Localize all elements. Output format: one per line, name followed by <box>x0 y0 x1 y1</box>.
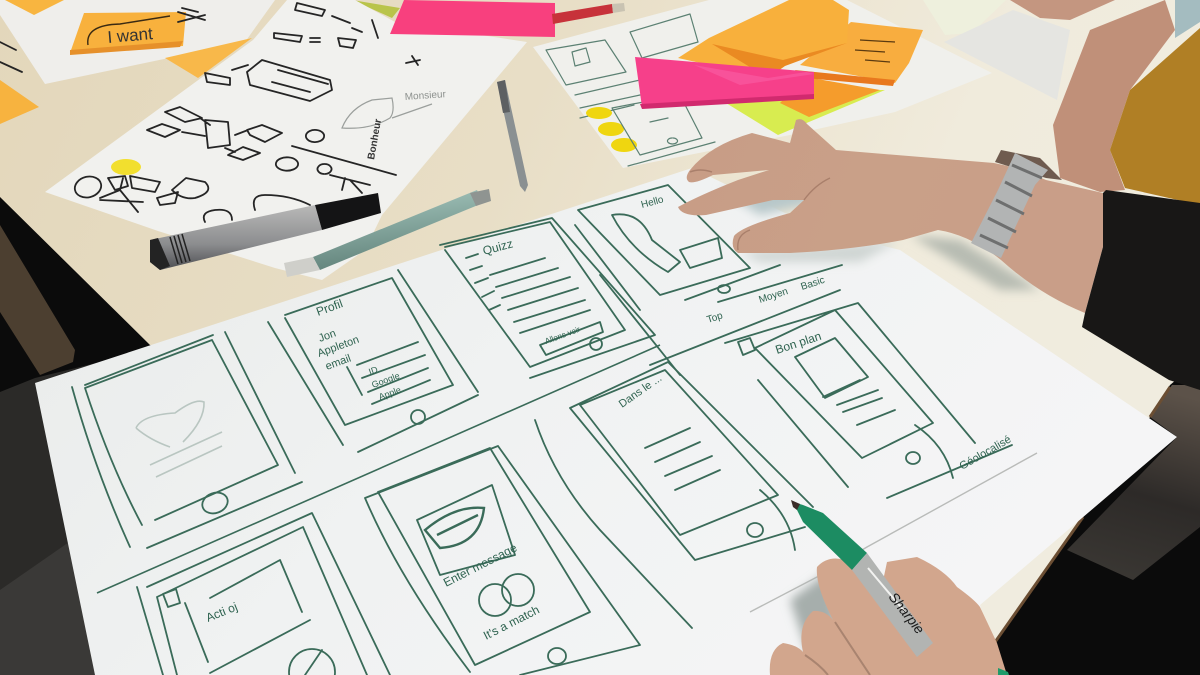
wireframe: profile screen: ID <box>367 364 380 377</box>
top-left paper with sticky notes: I want <box>107 24 154 47</box>
icon sketch sheet <box>45 0 527 280</box>
writing hand <box>770 557 1009 675</box>
wireframe: hero screen under hand: Basic <box>800 275 826 293</box>
wireframe: match screen <box>365 446 640 675</box>
top row icons <box>274 3 378 48</box>
wireframe: good deal screen: Bon plan <box>774 329 823 357</box>
icon sketch sheet: Monsieur <box>404 89 447 103</box>
wireframe: article screen: Dans le ... <box>617 372 664 410</box>
wireframe: profile screen: Profil <box>314 296 345 319</box>
wireframe: match screen: Enter message <box>441 540 520 590</box>
icon sketch sheet: Bonheur <box>366 118 384 161</box>
wireframe: quiz screen: Allons voir <box>544 325 582 346</box>
green Sharpie marker: Sharpie <box>886 589 928 637</box>
black sleeve <box>1082 190 1200 390</box>
wireframe: heart screen <box>72 332 302 548</box>
black marker <box>150 193 381 270</box>
far right sheet and pale note <box>923 0 1070 100</box>
wireframe: action screen: Acti oj <box>204 600 239 625</box>
wireframe: profile screen: Google <box>370 371 401 390</box>
orange and pink sticky notes <box>635 0 923 135</box>
paper fold lines <box>97 345 660 593</box>
wireframe: profile screen: email <box>324 353 353 373</box>
wireframe: action screen <box>137 513 390 675</box>
shadows around hand <box>720 185 1040 660</box>
wireframe: hero screen under hand: Top <box>706 310 725 326</box>
arm behind top right <box>1010 0 1200 192</box>
top pink sticky note <box>390 0 555 37</box>
wireframe: profile screen: Apple <box>377 385 402 402</box>
linked houses diagram <box>147 107 282 160</box>
teal pen <box>284 189 491 277</box>
green notes and wireframes <box>546 14 698 118</box>
silver wristwatch <box>971 150 1062 258</box>
wireframe: good deal screen <box>725 303 1013 498</box>
wireframe: profile screen: Jon <box>317 327 338 345</box>
wireframe: quiz screen <box>440 218 655 378</box>
table brown edge <box>993 387 1170 645</box>
interface card sketch <box>205 60 332 101</box>
wireframe: hero screen under hand <box>575 185 842 375</box>
wireframe: match screen: It's a match <box>481 603 542 643</box>
cloud sketches <box>204 195 310 222</box>
wireframe: profile screen <box>268 270 478 452</box>
top-centre wireframe sheet <box>533 0 992 168</box>
small scribble <box>406 56 420 65</box>
wireframe: hero screen under hand: Moyen <box>758 286 789 306</box>
divider and person <box>292 146 396 175</box>
hand on paper with wrist <box>678 119 1103 313</box>
yellow dots <box>586 107 637 152</box>
wireframe: good deal screen: Géolocalisé <box>958 433 1013 473</box>
small phone wireframe <box>612 95 715 166</box>
wireframe: article screen <box>535 362 813 628</box>
main sketch paper <box>35 168 1177 675</box>
grey pen on table <box>497 80 528 192</box>
mustard sweater <box>1110 28 1200 205</box>
green Sharpie marker <box>791 500 933 657</box>
wireframe: hero screen under hand: Hello <box>640 194 665 211</box>
small icons <box>108 176 208 205</box>
wireframe: profile screen: Appleton <box>316 334 361 360</box>
fold line on lower sheet <box>750 453 1037 612</box>
wireframe: quiz screen: Quizz <box>481 236 514 258</box>
smiley stick figure <box>75 176 143 212</box>
yellow dot <box>111 159 141 175</box>
red pencil <box>552 3 625 24</box>
cat sketch <box>342 98 432 128</box>
colour tab strip <box>352 0 400 18</box>
top-left paper with sticky notes <box>0 0 275 124</box>
